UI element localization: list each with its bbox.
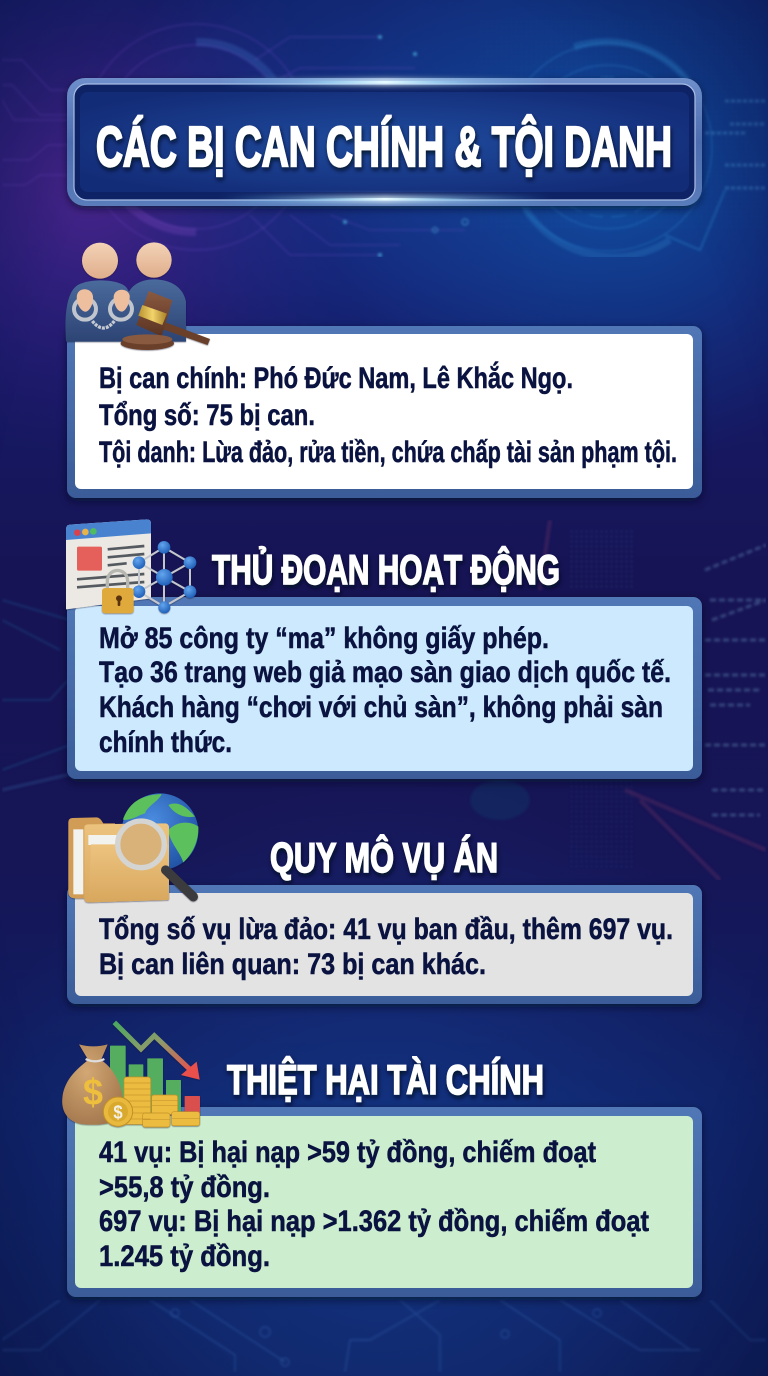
heading: financial damage: THIỆT HẠI TÀI CHÍNH bbox=[227, 1055, 544, 1103]
defendants text: Bị can chính: Phó Đức Nam, Lê Khắc Ngọ. bbox=[99, 361, 573, 395]
defendants text: Tổng số: 75 bị can. bbox=[99, 399, 315, 432]
panel: defendants bbox=[67, 326, 702, 498]
icon: folders, globe and magnifier bbox=[68, 793, 198, 902]
tactics text: chính thức. bbox=[99, 726, 232, 759]
panel: financial damage bbox=[67, 1107, 702, 1297]
tactics text: Khách hàng “chơi với chủ sàn”, không phải sàn bbox=[99, 691, 663, 724]
defendants text bbox=[99, 361, 677, 469]
tactics text: Mở 85 công ty “ma” không giấy phép. bbox=[99, 622, 549, 655]
financial damage text: 41 vụ: Bị hại nạp >59 tỷ đồng, chiếm đoạt bbox=[99, 1136, 596, 1169]
panel: tactics bbox=[67, 597, 702, 779]
panel: scale bbox=[67, 885, 702, 1004]
heading: tactics: THỦ ĐOẠN HOẠT ĐỘNG bbox=[212, 545, 560, 593]
heading: scale: QUY MÔ VỤ ÁN bbox=[270, 833, 498, 881]
scale text bbox=[99, 913, 673, 981]
financial damage text: 697 vụ: Bị hại nạp >1.362 tỷ đồng, chiếm đoạt bbox=[99, 1205, 649, 1238]
financial damage text: 1.245 tỷ đồng. bbox=[99, 1240, 270, 1273]
icon: money bag, coins and falling chart: $ bbox=[113, 1101, 123, 1122]
tactics text bbox=[99, 622, 671, 759]
icon: web page, padlock and network bbox=[66, 519, 196, 613]
icon: money bag, coins and falling chart bbox=[62, 1022, 200, 1127]
financial damage text bbox=[99, 1136, 649, 1273]
scale text: Bị can liên quan: 73 bị can khác. bbox=[99, 948, 486, 981]
financial damage text: >55,8 tỷ đồng. bbox=[99, 1171, 270, 1204]
title banner bbox=[67, 78, 702, 206]
icon: defendants in handcuffs with gavel bbox=[65, 242, 210, 350]
icon: money bag, coins and falling chart: $ bbox=[83, 1071, 103, 1112]
